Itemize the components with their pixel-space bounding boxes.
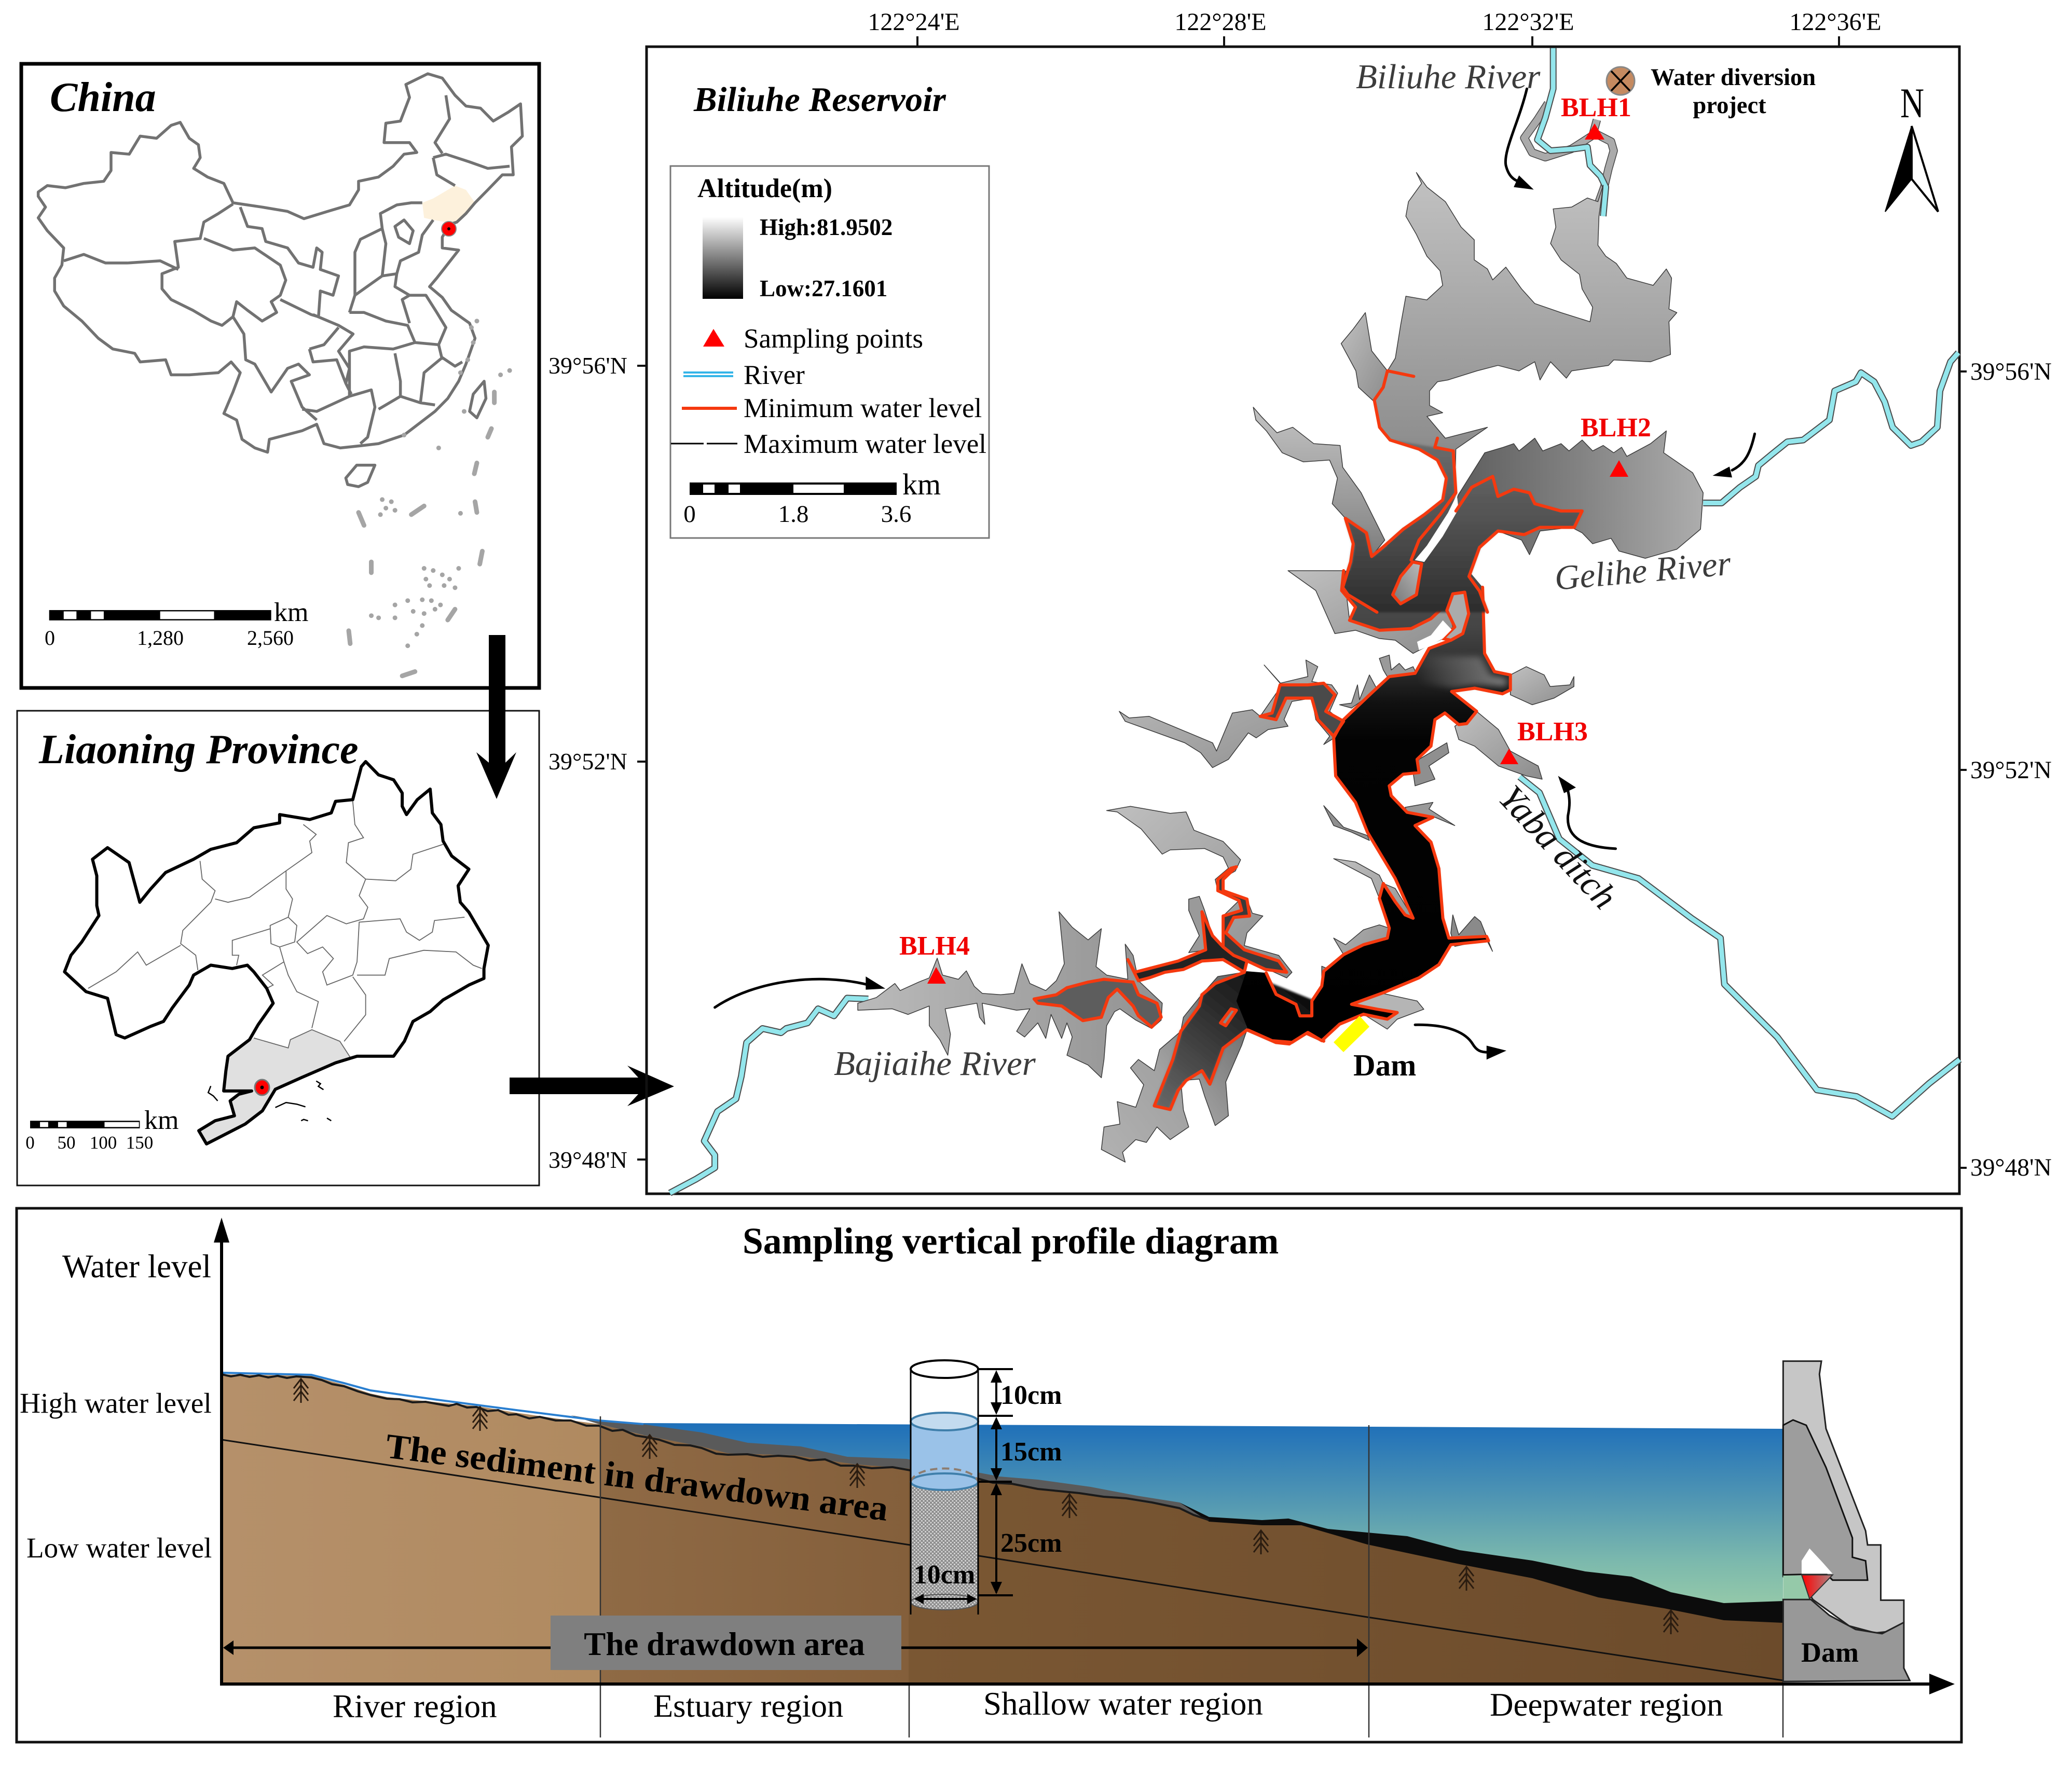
legend	[670, 166, 989, 538]
panel: China map	[21, 64, 539, 688]
north-west channel	[1260, 683, 1343, 736]
heading: Sampling vertical profile diagram	[743, 1221, 1279, 1262]
Liaoning highlight	[422, 186, 475, 222]
sediment boundary line	[222, 1440, 1783, 1680]
y-axis labels: Water level	[62, 1248, 211, 1285]
scale labels	[25, 1106, 179, 1153]
heading: Biliuhe Reservoir: Biliuhe Reservoir	[693, 80, 946, 119]
longitude ticks and labels: 122°24'E	[868, 8, 960, 36]
latitude ticks and labels: 39°56'N	[548, 352, 627, 379]
dam label: Dam	[1801, 1637, 1859, 1668]
west channel	[1128, 912, 1247, 981]
arrow: Biliuhe inflow	[1505, 89, 1534, 190]
label: sediment in drawdown area: The sediment in drawdown area	[383, 1426, 890, 1528]
arrow: Gelihe inflow	[1712, 434, 1755, 477]
river band BLH1	[1524, 103, 1614, 202]
reservoir: northern basins	[1253, 48, 1958, 584]
river labels: Gelihe River	[1553, 544, 1733, 598]
reservoir: main deep channel	[1237, 571, 1511, 1042]
Bajiaihe arm	[858, 912, 1162, 1078]
core dimensions: 10cm	[1000, 1381, 1062, 1410]
sampling core cylinder	[910, 1360, 978, 1615]
reservoir: upper junction water	[1343, 371, 1582, 612]
arrow: Yaba inflow	[1558, 776, 1616, 849]
dam marker: Dam	[1353, 1048, 1416, 1082]
legend: 0	[683, 501, 696, 528]
upper western lobe	[1107, 806, 1292, 978]
surface sediment layer	[571, 1415, 1209, 1520]
legend: High:81.9502	[760, 214, 893, 240]
legend: km	[902, 467, 941, 501]
scale labels: 100	[90, 1133, 117, 1153]
scale labels: 150	[126, 1133, 153, 1153]
longitude ticks and labels: 122°36'E	[1789, 8, 1882, 36]
sampling triangles	[927, 123, 1628, 984]
reservoir: light outer arms	[1119, 571, 1574, 1029]
heading: Liaoning Province: Liaoning Province	[38, 727, 359, 772]
map: Liaoning cities	[30, 762, 488, 1144]
scale bar	[49, 610, 271, 620]
sampling core cylinder: 10cm	[914, 1560, 975, 1590]
arrow: China to Liaoning	[476, 635, 516, 799]
region labels: Deepwater region	[1490, 1687, 1723, 1723]
axes	[214, 1218, 1955, 1694]
legend: Minimum water level	[744, 393, 982, 423]
dam marker	[1334, 1016, 1416, 1082]
north-west finger	[1341, 313, 1388, 402]
region labels: Estuary region	[653, 1688, 843, 1724]
scale labels: 1,280	[137, 626, 184, 650]
legend: Maximum water level	[744, 429, 986, 459]
core dimensions: 15cm	[1000, 1437, 1062, 1467]
scale labels: 0	[45, 626, 55, 650]
longitude ticks and labels: 122°32'E	[1482, 8, 1574, 36]
flow arrows	[715, 89, 1755, 1059]
scale labels: 0	[25, 1133, 35, 1153]
Gelihe lobe	[1427, 431, 1703, 584]
south-west lobes	[1101, 972, 1247, 1162]
arrow: Bajiaihe inflow	[715, 976, 885, 1008]
legend: 3.6	[881, 501, 911, 528]
ground	[222, 1374, 1783, 1684]
Bajiaihe inner water	[1034, 979, 1161, 1027]
legend: 1.8	[778, 501, 808, 528]
upstream surface lines	[222, 1373, 1209, 1520]
sampling labels	[899, 93, 1651, 961]
region labels: Shallow water region	[983, 1686, 1263, 1722]
river labels: Yaba ditch	[1491, 778, 1625, 917]
panel: Liaoning Province map	[17, 711, 539, 1185]
north-west inner finger	[1218, 867, 1287, 972]
latitude ticks and labels: 39°56'N	[1970, 358, 2052, 385]
west arm	[1253, 407, 1385, 573]
water body	[643, 1423, 1783, 1608]
black deep sediment	[1179, 1502, 1783, 1623]
red minimum water line	[1248, 571, 1511, 1042]
small shoal	[1220, 1009, 1237, 1026]
scale bar	[30, 1121, 140, 1128]
scale labels: km	[274, 598, 308, 627]
region labels: River region	[333, 1688, 497, 1724]
drawdown area arrow	[223, 1616, 1368, 1670]
core dimensions: 25cm	[1000, 1528, 1062, 1558]
north arrow	[1885, 79, 1938, 212]
red line north	[1343, 371, 1582, 612]
arrow: Liaoning to reservoir	[510, 1066, 674, 1106]
scale labels: 50	[57, 1133, 76, 1153]
y-axis labels: High water level	[20, 1388, 212, 1419]
river: Yaba ditch	[1519, 777, 1959, 1116]
region dividers	[600, 1416, 1783, 1737]
legend: Sampling points	[744, 324, 923, 354]
white land sliver	[1415, 494, 1459, 562]
panel: sampling vertical profile diagram	[17, 1208, 1961, 1742]
latitude ticks and labels: 39°48'N	[1970, 1154, 2052, 1181]
north arrow: N	[1900, 79, 1924, 127]
reservoir: spur patch	[1417, 592, 1469, 650]
arrow: dam outflow	[1415, 1025, 1506, 1059]
location dot	[442, 222, 456, 236]
water diversion project	[1607, 64, 1816, 119]
drawdown area arrow: The drawdown area	[584, 1626, 865, 1662]
core dimensions	[978, 1369, 1062, 1595]
reservoir: western basins	[670, 806, 1324, 1193]
river labels: Biliuhe River	[1356, 58, 1541, 96]
water diversion project: Water diversion	[1651, 64, 1816, 91]
heading: China: China	[50, 75, 156, 120]
river labels: Bajiaihe River	[834, 1044, 1036, 1083]
scale labels: km	[144, 1106, 179, 1135]
south-west deep channel	[1154, 972, 1324, 1110]
Dalian highlight	[199, 1030, 351, 1144]
river: Gelihe	[1703, 353, 1958, 503]
y-axis labels: Low water level	[26, 1532, 212, 1564]
shallow bay	[1419, 655, 1506, 688]
latitude ticks and labels: 39°52'N	[1970, 757, 2052, 784]
longitude ticks and labels: 122°28'E	[1174, 8, 1267, 36]
dam cross-section	[1783, 1361, 1910, 1681]
sampling labels: BLH1	[1561, 93, 1631, 122]
sampling labels: BLH2	[1581, 413, 1651, 443]
region labels	[333, 1686, 1723, 1724]
river: Bajiaihe	[670, 998, 868, 1193]
legend: Low:27.1601	[760, 275, 887, 301]
water diversion project: project	[1693, 92, 1766, 119]
map: China provinces	[38, 74, 523, 676]
scale labels	[45, 598, 308, 650]
legend: Altitude(m)	[697, 174, 832, 203]
sampling labels: BLH3	[1517, 717, 1588, 747]
latitude ticks and labels: 39°48'N	[548, 1147, 627, 1173]
island	[1393, 562, 1422, 604]
latitude ticks and labels	[548, 352, 2052, 1181]
scale labels: 2,560	[247, 626, 294, 650]
river labels	[834, 58, 1733, 1083]
y-axis labels	[20, 1248, 241, 1564]
legend: River	[744, 360, 805, 390]
root symbols	[294, 1379, 1678, 1634]
longitude ticks and labels	[868, 8, 1882, 47]
river: Biliuhe	[1538, 48, 1606, 216]
sampling labels: BLH4	[899, 931, 970, 961]
location dot	[255, 1080, 269, 1095]
panel: Biliuhe Reservoir map	[548, 8, 2052, 1194]
north lobe	[1374, 173, 1677, 546]
latitude ticks and labels: 39°52'N	[548, 748, 627, 775]
